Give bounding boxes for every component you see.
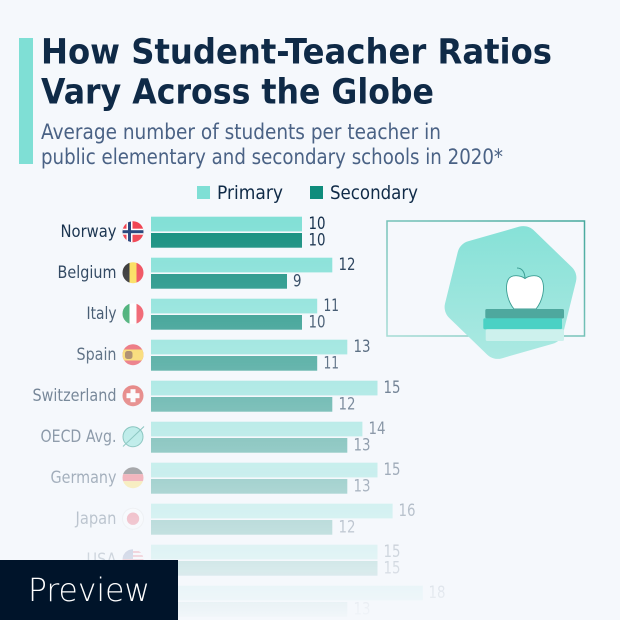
icon: Switzerland flag [122, 385, 144, 406]
icon: USA flag [122, 549, 144, 560]
icon: Japan flag [122, 512, 144, 525]
row: Belgium: Belgium [58, 263, 116, 282]
row: Japan: 12 [338, 518, 356, 537]
row: Germany [51, 462, 400, 494]
title: Vary Across the Globe [41, 72, 434, 112]
row: OECD Avg.: 13 [354, 436, 370, 455]
row: Norway [62, 216, 325, 248]
legend: Secondary [330, 182, 418, 204]
row: Norway: 10 [308, 214, 326, 233]
row: Germany: 13 [354, 477, 370, 496]
illustration: apple on books [387, 221, 584, 344]
row: USA: USA [86, 550, 117, 569]
top book [485, 309, 564, 318]
subtitle: Average number of students per teacher in [41, 120, 441, 144]
icon: Italy flag [122, 304, 144, 324]
icon: apple [507, 268, 543, 309]
row: Spain: 13 [354, 337, 370, 356]
subtitle [41, 120, 503, 169]
row: OECD Avg.: 14 [368, 419, 386, 438]
row: Switzerland: 12 [338, 395, 356, 414]
preview badge: Preview [28, 571, 150, 609]
row: partially faded last row: 18 [428, 583, 446, 602]
row: OECD Avg.: OECD Avg. [40, 427, 116, 446]
title [41, 32, 552, 112]
row: Belgium: 9 [293, 272, 302, 291]
row: Japan [74, 504, 415, 535]
preview badge [0, 560, 178, 620]
row: Italy [88, 298, 338, 330]
icon: Norway flag [122, 221, 144, 243]
row: Switzerland: Switzerland [32, 386, 116, 405]
row: Norway: 10 [308, 231, 326, 250]
middle book [483, 318, 562, 329]
subtitle: public elementary and secondary schools in 2020* [41, 145, 503, 169]
illustration frame [387, 221, 584, 336]
row: partially faded last row: 13 [354, 600, 370, 619]
row: USA: 15 [384, 559, 400, 578]
icon: Belgium flag [122, 262, 144, 284]
row: USA: 15 [384, 542, 400, 561]
row: USA [88, 544, 400, 576]
icon: Germany flag [122, 467, 144, 489]
row: Italy: 10 [308, 313, 326, 332]
row: Switzerland: 15 [384, 378, 400, 397]
icon: Spain flag [122, 344, 144, 366]
row: OECD Avg. [41, 422, 385, 453]
row: Italy: 11 [324, 296, 339, 315]
bottom book [486, 329, 564, 341]
row: Belgium [58, 258, 354, 289]
row: Japan: Japan [75, 509, 116, 528]
row: Italy: Italy [86, 304, 117, 323]
bar chart [32, 214, 446, 619]
icon: OECD globe [123, 426, 144, 447]
legend [197, 182, 418, 204]
row: Belgium: 12 [338, 255, 356, 274]
row: Spain [77, 340, 370, 371]
row: Germany: 15 [384, 460, 400, 479]
title: How Student-Teacher Ratios [41, 32, 552, 72]
row: Spain: 11 [324, 354, 339, 373]
title accent bar [19, 38, 33, 164]
row: Norway: Norway [60, 222, 117, 241]
row: Germany: Germany [50, 468, 117, 487]
row: Japan: 16 [398, 501, 416, 520]
rounded hexagon backdrop [460, 241, 561, 344]
row: Spain: Spain [76, 345, 116, 364]
legend: Primary [217, 182, 283, 204]
row: partially faded last row [178, 586, 444, 610]
row: Switzerland [34, 380, 400, 412]
